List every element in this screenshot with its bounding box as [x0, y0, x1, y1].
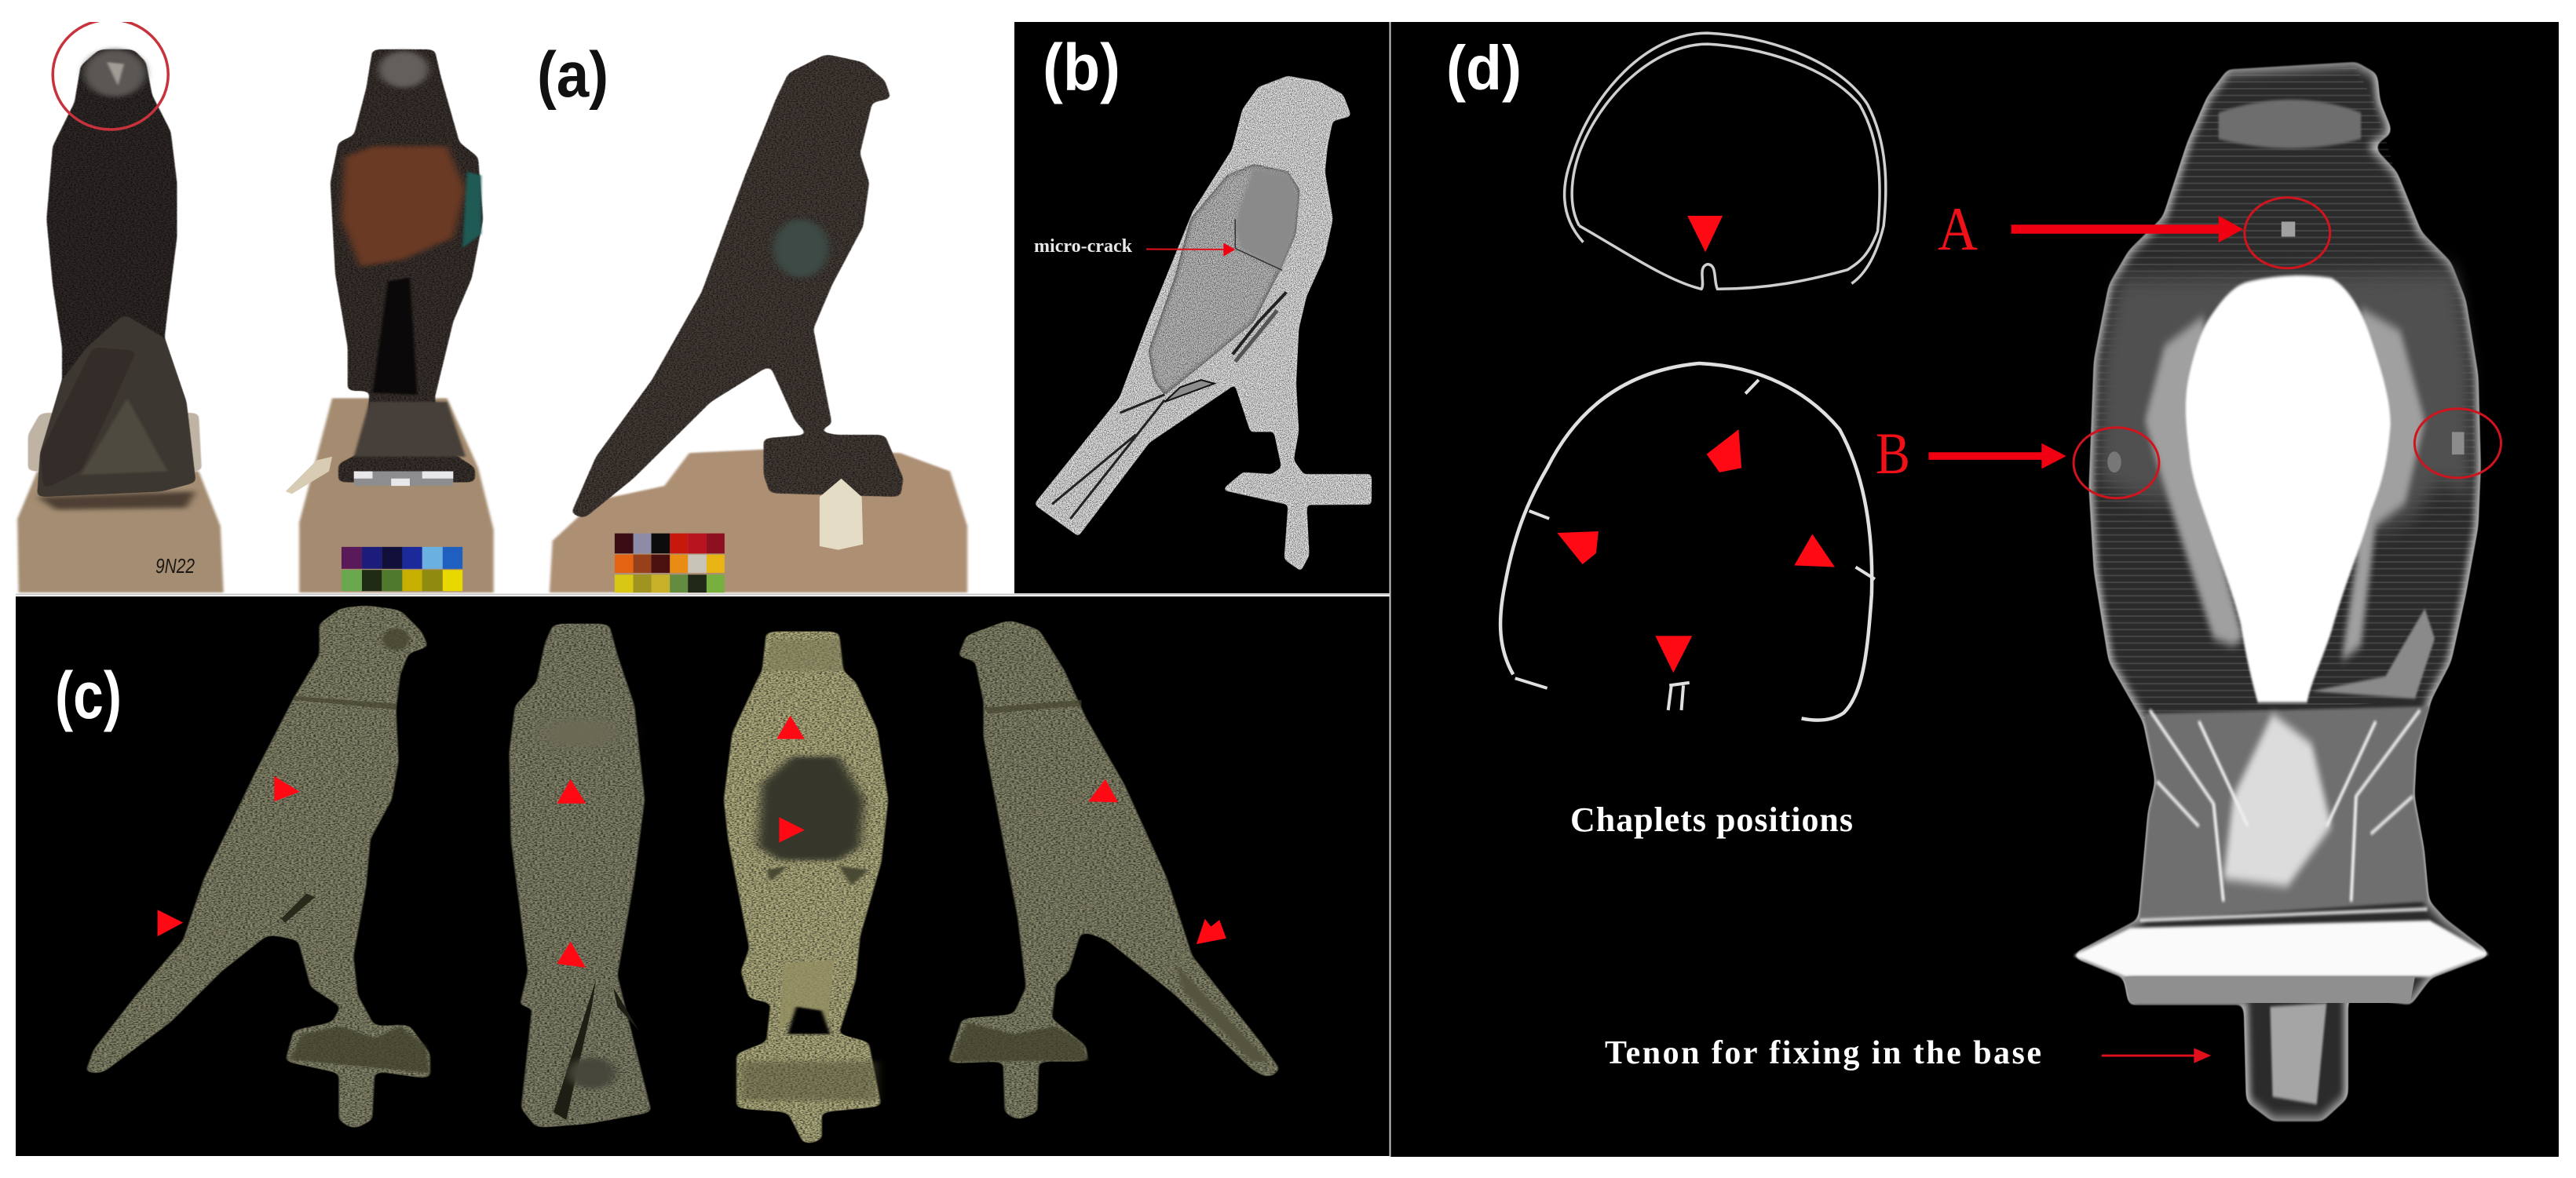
- chaplet circle B right: [2414, 409, 2501, 478]
- red markers on renderings: [158, 716, 1226, 968]
- mask above the panel edge: [0, 0, 1013, 22]
- handwritten inventory number: 9N22: [155, 554, 195, 578]
- arrow from B: [1928, 443, 2066, 469]
- panel letter b: (b): [1043, 31, 1120, 104]
- marker on slice A: [1687, 216, 1723, 252]
- panel c: 3D CT renderings: [16, 596, 1390, 1156]
- label B: B: [1876, 421, 1910, 487]
- markers on slice B: [1557, 429, 1835, 673]
- slice A ring: [1565, 33, 1886, 289]
- tenon arrow: [2102, 1048, 2211, 1063]
- panel d: CT slices and radiograph with chaplets: [1390, 22, 2559, 1157]
- red circle around the head: [53, 20, 168, 129]
- panel a: photographs of the falcon statue: [0, 0, 1013, 593]
- falcon radiograph: [2074, 64, 2489, 1119]
- label A: A: [1938, 195, 1978, 263]
- chaplet circle B left: [2074, 428, 2159, 498]
- panel b: CT slice with micro-crack: [1014, 22, 1390, 593]
- panel divider lines: [16, 22, 1390, 1157]
- photo: back view of falcon: [17, 49, 224, 593]
- photo: side view of falcon: [550, 54, 967, 593]
- chaplet circle A: [2245, 198, 2330, 268]
- arrow from A: [2011, 216, 2243, 243]
- slice B ring: [1500, 363, 1875, 720]
- rendering: right side view: [948, 620, 1280, 1121]
- photo: front view of falcon: [286, 49, 494, 593]
- caption: tenon: Tenon for fixing in the base: [1605, 1035, 2041, 1071]
- panel letter c: (c): [55, 658, 122, 732]
- rendering: inner front view: [724, 632, 888, 1146]
- micro-crack arrow: [1146, 243, 1235, 257]
- caption: chaplets positions: Chaplets positions: [1570, 801, 1853, 839]
- panel letter d: (d): [1446, 33, 1522, 103]
- rendering: back view: [510, 624, 652, 1128]
- colour chart: front view: [342, 547, 462, 591]
- falcon cross-section: [1035, 77, 1371, 570]
- micro-crack label: micro-crack: [1034, 236, 1133, 257]
- panel letter a: (a): [537, 39, 608, 111]
- colour chart: side view: [615, 534, 725, 593]
- rendering: left side view: [85, 605, 430, 1130]
